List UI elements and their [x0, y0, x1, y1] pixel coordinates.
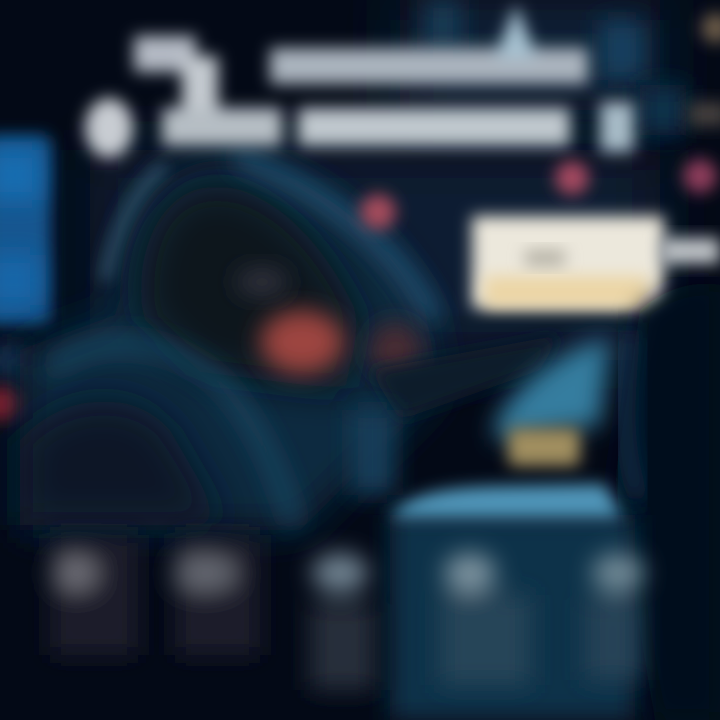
title: two blurred headline lines — [85, 4, 634, 158]
top-right small markers — [688, 13, 720, 126]
stat column 2 — [173, 535, 260, 655]
bottom stat columns — [50, 535, 644, 690]
left blue panel — [0, 135, 51, 422]
cyan glow beneath card — [495, 338, 610, 466]
right dark figure — [615, 284, 720, 720]
hooded figure — [20, 155, 560, 530]
stat column 1 — [50, 535, 138, 655]
stat column 4 — [440, 553, 530, 685]
stat column 5 — [585, 553, 644, 680]
laptop lid with light edge — [390, 484, 635, 720]
bright glowing card — [472, 216, 720, 308]
red alert markers — [360, 159, 717, 230]
stat column 3 — [310, 553, 375, 690]
